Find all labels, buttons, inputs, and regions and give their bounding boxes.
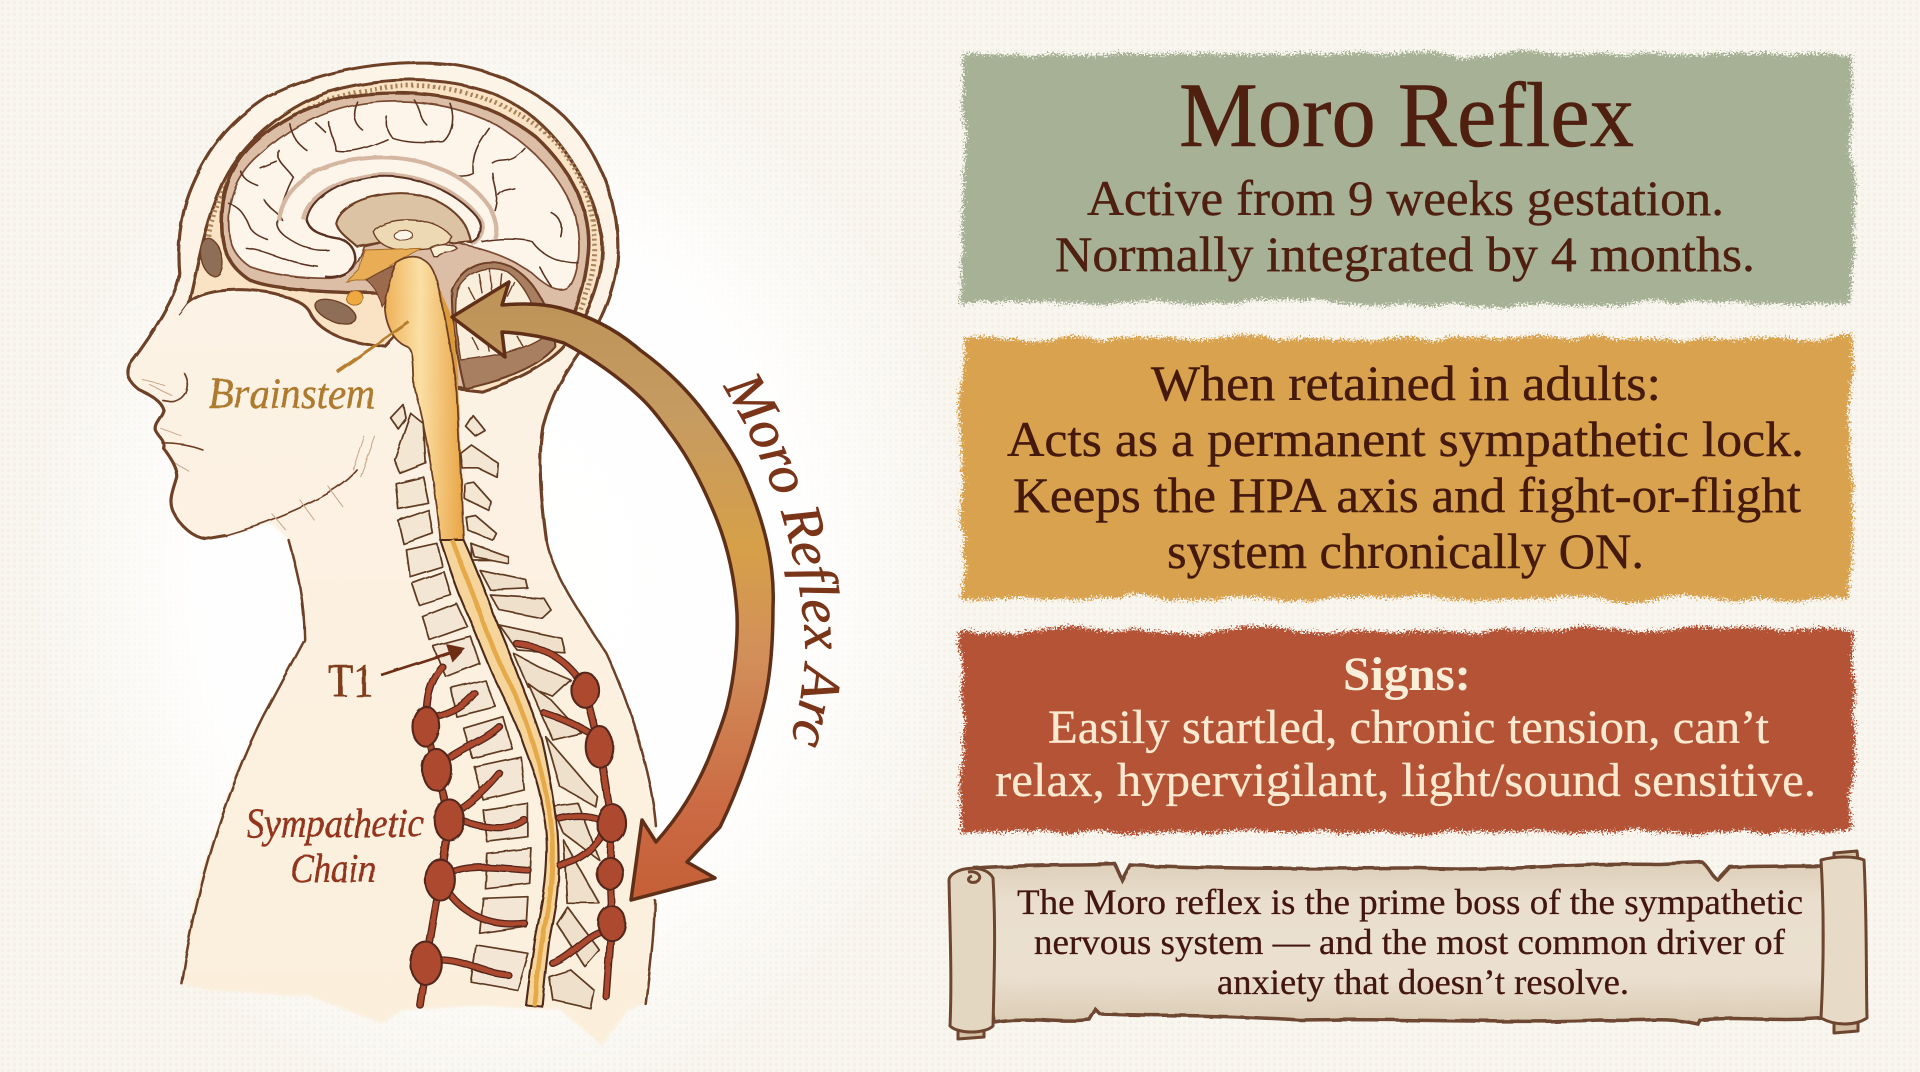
panel: parchment scroll — [949, 851, 1867, 1039]
spinal cord — [440, 540, 559, 1007]
scroll right roller — [1821, 851, 1867, 1033]
text: retained in adults — [1007, 355, 1804, 579]
label: T1: T1 — [328, 655, 374, 708]
head outline — [128, 63, 618, 540]
thalamus region — [336, 193, 471, 250]
anatomical illustration: head and spine — [128, 63, 656, 1047]
sympathetic chain — [410, 644, 626, 1005]
thoracic vertebral bodies — [406, 543, 531, 990]
heading: Signs: Signs: — [1343, 648, 1471, 701]
spinous processes — [471, 543, 599, 1008]
panel: signs (brick red) — [962, 630, 1852, 832]
arrow: Moro reflex arc — [452, 282, 773, 900]
text: signs list: Easily startled, chronic tension, can’t — [1048, 701, 1770, 754]
label: Brainstem: Brainstem — [209, 371, 375, 418]
text: timing: Normally integrated by 4 months. — [1055, 226, 1755, 282]
face details — [143, 302, 375, 535]
text: retained in adults: When retained in adults: — [1151, 355, 1661, 411]
text: retained in adults: system chronically ON. — [1167, 523, 1644, 579]
label: Moro Reflex Arc curved text: Moro Reflex Arc — [722, 373, 840, 748]
skull band — [189, 80, 602, 392]
panel: when retained (amber) — [962, 338, 1852, 599]
arrow: T1 pointer — [381, 644, 465, 675]
brainstem — [385, 257, 464, 540]
scroll left roller — [949, 868, 995, 1039]
cervical vertebrae — [391, 405, 507, 560]
scroll body — [975, 862, 1824, 1024]
sinus cavities — [197, 236, 360, 329]
scroll text: The Moro reflex is the prime boss of the sympathetic — [1017, 882, 1803, 922]
hypothalamus and pituitary — [346, 248, 421, 307]
cerebrum — [229, 101, 579, 290]
heading: Moro Reflex: Moro Reflex — [1179, 64, 1634, 166]
text: signs list: relax, hypervigilant, light/sound sensitive. — [995, 754, 1816, 807]
brainstem label leader — [337, 322, 409, 372]
text: timing — [1055, 170, 1755, 282]
skull diploe band — [207, 86, 595, 343]
text: retained in adults: Acts as a permanent sympathetic lock. — [1007, 411, 1804, 467]
text: retained in adults: Keeps the HPA axis and fight-or-flight — [1013, 467, 1801, 523]
text: signs list — [995, 701, 1816, 807]
body silhouette wash — [128, 63, 656, 1047]
inner dura line — [222, 93, 589, 388]
label: Sympathetic Chain: Sympathetic — [246, 800, 424, 846]
scroll text: anxiety that doesn’t resolve. — [1217, 962, 1629, 1002]
cingulate and corpus callosum — [279, 157, 496, 277]
label: Sympathetic Chain: Chain — [290, 845, 376, 891]
tectum — [430, 245, 457, 257]
scroll text: nervous system — and the most common driver of — [1034, 922, 1785, 962]
scroll text — [1017, 882, 1803, 1002]
sulci and gyri — [229, 100, 579, 287]
cerebellum folia — [456, 268, 541, 360]
text: timing: Active from 9 weeks gestation. — [1087, 170, 1724, 226]
cerebellum — [452, 262, 555, 388]
panel: title (sage green) — [962, 54, 1852, 304]
back and chest contour — [181, 540, 656, 1004]
brainstem shadow band — [437, 283, 464, 540]
label: Sympathetic Chain — [246, 800, 424, 891]
